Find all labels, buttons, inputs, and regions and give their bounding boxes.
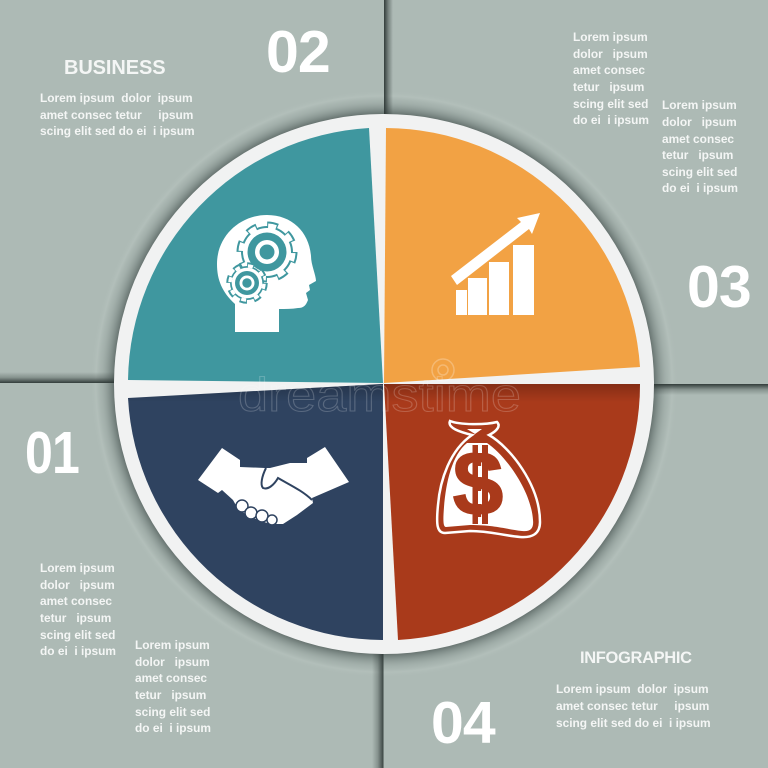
text block: bottom left 2: Lorem ipsum — [135, 638, 210, 652]
text block: top right 1 — [573, 30, 649, 127]
watermark: dreamstime — [238, 368, 521, 421]
text block: top right 2: dolor ipsum — [662, 115, 737, 129]
large gear — [240, 225, 294, 279]
heading: business: BUSINESS — [64, 57, 165, 79]
text block: infographic: Lorem ipsum dolor ipsum — [556, 682, 709, 696]
dollar double bar — [472, 445, 488, 524]
text block: top right 1: do ei i ipsum — [573, 113, 649, 127]
text block: top right 2: amet consec — [662, 132, 734, 146]
text block: business: amet consec tetur ipsum — [40, 108, 193, 122]
icon: head with gears — [217, 215, 316, 332]
fold line: top — [384, 0, 393, 116]
text block: bottom left 2: do ei i ipsum — [135, 721, 211, 735]
text block: bottom left 1 — [40, 561, 116, 658]
text block: business: Lorem ipsum dolor ipsum — [40, 91, 193, 105]
text block: business — [40, 91, 195, 138]
text block: infographic — [556, 682, 711, 730]
text block: top right 1: tetur ipsum — [573, 80, 644, 94]
text block: top right 1: amet consec — [573, 63, 645, 77]
fold line: bottom — [372, 652, 384, 768]
text block: top right 2: do ei i ipsum — [662, 181, 738, 195]
text block: bottom left 1: Lorem ipsum — [40, 561, 115, 575]
text block: top right 2: Lorem ipsum — [662, 98, 737, 112]
text block: bottom left 2: amet consec — [135, 671, 207, 685]
text block: infographic: amet consec tetur ipsum — [556, 699, 709, 713]
dollar sign: $ — [452, 433, 504, 535]
text block: bottom left 2: tetur ipsum — [135, 688, 206, 702]
number 01: 01 — [25, 420, 79, 486]
text block: bottom left 1: amet consec — [40, 594, 112, 608]
small gear — [229, 265, 265, 301]
text block: top right 2 — [662, 98, 738, 195]
wedge top shading — [188, 384, 640, 398]
number 04: 04 — [431, 690, 496, 756]
number 02: 02 — [266, 19, 330, 85]
text block: business: scing elit sed do ei i ipsum — [40, 124, 195, 138]
text block: bottom left 2 — [135, 638, 211, 735]
text block: top right 2: scing elit sed — [662, 165, 737, 179]
text block: bottom left 1: dolor ipsum — [40, 578, 115, 592]
text block: infographic: scing elit sed do ei i ipsum — [556, 716, 711, 730]
text block: top right 1: scing elit sed — [573, 97, 648, 111]
icon: growth chart with arrow — [451, 213, 540, 315]
text block: top right 2: tetur ipsum — [662, 148, 733, 162]
text block: top right 1: Lorem ipsum — [573, 30, 648, 44]
circle halo shadow — [90, 90, 678, 678]
pie wedge: teal — [128, 128, 383, 383]
number 03: 03 — [687, 254, 751, 320]
text block: top right 1: dolor ipsum — [573, 47, 648, 61]
text block: bottom left 1: tetur ipsum — [40, 611, 111, 625]
pie wedge: rust — [384, 384, 640, 640]
fold line: right — [650, 384, 768, 395]
icon: handshake — [198, 447, 349, 525]
white pie disc — [114, 114, 654, 654]
text block: bottom left 1: do ei i ipsum — [40, 644, 116, 658]
pie wedge: orange — [384, 128, 640, 383]
pie wedge: navy — [128, 384, 383, 640]
text block: bottom left 2: dolor ipsum — [135, 655, 210, 669]
fold line: left — [0, 372, 118, 383]
text block: bottom left 2: scing elit sed — [135, 705, 210, 719]
icon: money bag — [437, 421, 540, 537]
heading: infographic: INFOGRAPHIC — [580, 649, 692, 667]
text block: bottom left 1: scing elit sed — [40, 628, 115, 642]
